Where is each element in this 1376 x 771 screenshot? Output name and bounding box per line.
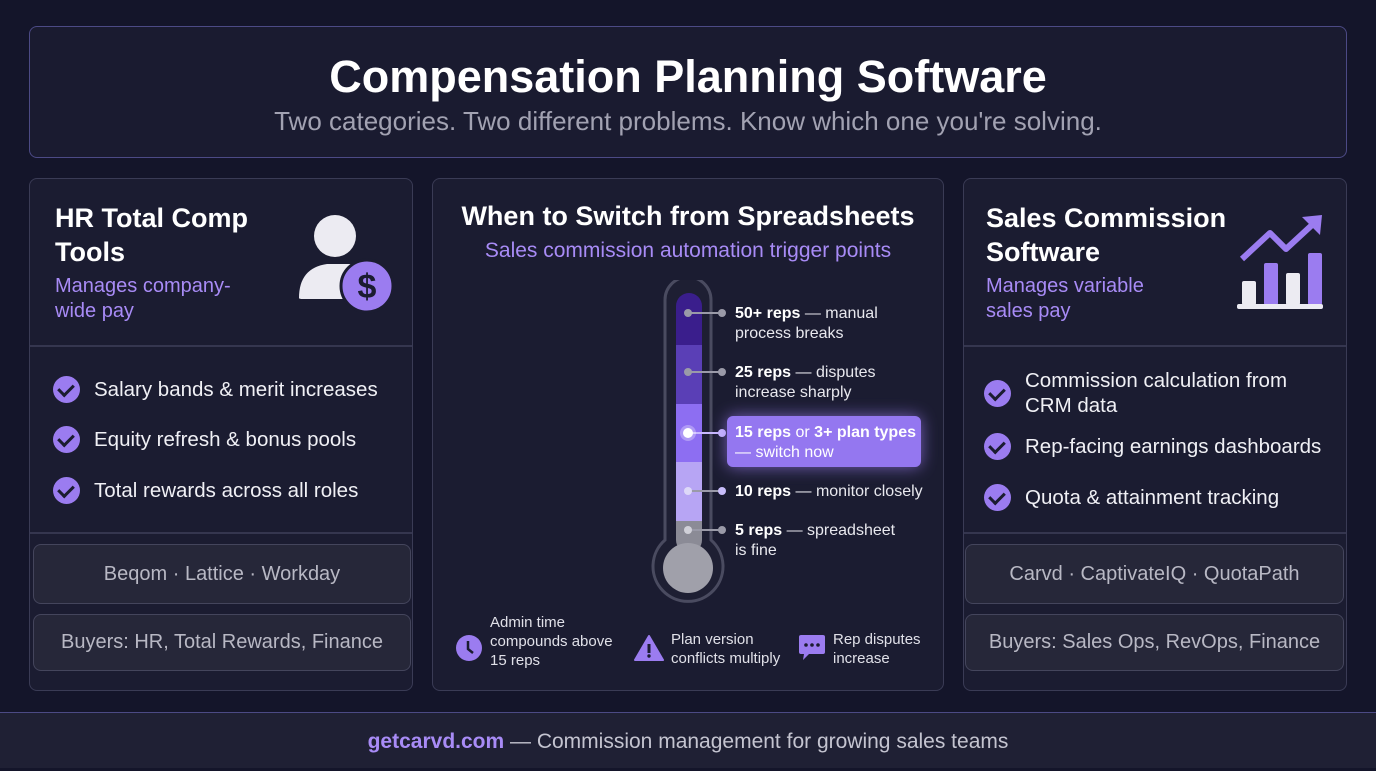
- label: 15 reps callout: [735, 424, 916, 461]
- feature list: [53, 376, 378, 504]
- buyers box: [965, 614, 1344, 671]
- panel: when to switch: [432, 178, 944, 691]
- icon: clock: [456, 635, 482, 661]
- heading: When to Switch from Spreadsheets: [461, 201, 915, 231]
- heading: Software: [986, 237, 1100, 267]
- footer: [0, 712, 1376, 768]
- label: 50+ reps: 50+ reps — manual: [735, 305, 878, 322]
- subtitle: Two categories. Two different problems. Know which one you're solving.: [274, 106, 1102, 136]
- label: 25 reps: 25 reps — disputes: [735, 364, 876, 381]
- text: plan version: Plan version: [671, 631, 754, 648]
- text: admin time: 15 reps: [490, 652, 540, 669]
- heading: Sales Commission: [986, 203, 1226, 233]
- vendors box: Beqom · Lattice · Workday: [104, 562, 340, 584]
- icon: bar chart with arrow: [1237, 215, 1323, 309]
- vendors box: [33, 544, 411, 604]
- text: rep disputes: [833, 631, 921, 667]
- label: 10 reps: 10 reps — monitor closely: [735, 483, 923, 500]
- label: 25 reps: increase sharply: [735, 384, 852, 401]
- chart: thermometer: [652, 280, 932, 603]
- label: 5 reps: [735, 522, 895, 559]
- subheading: sales pay: [986, 300, 1070, 322]
- vendors box: Carvd · CaptivateIQ · QuotaPath: [1009, 562, 1300, 584]
- label: 15 reps callout: — switch now: [735, 444, 834, 461]
- buyers box: Buyers: Sales Ops, RevOps, Finance: [989, 631, 1320, 653]
- label: 50+ reps: [735, 305, 878, 342]
- feature list: Rep-facing earnings dashboards: [1025, 435, 1321, 458]
- text: admin time: compounds above: [490, 633, 613, 650]
- label: 50+ reps: process breaks: [735, 325, 844, 342]
- text: admin time: Admin time: [490, 614, 565, 631]
- label: 5 reps: 5 reps — spreadsheet: [735, 522, 895, 539]
- subheading: Sales commission automation trigger points: [485, 239, 891, 262]
- subheading: [986, 275, 1144, 322]
- feature list: Commission calculation from: [1025, 369, 1287, 392]
- subheading: Manages company-: [55, 275, 231, 297]
- subheading: wide pay: [55, 300, 134, 322]
- feature list: [984, 369, 1321, 511]
- heading: [55, 203, 248, 267]
- label: 5 reps: is fine: [735, 542, 777, 559]
- icon: warning: [634, 635, 664, 661]
- heading: Tools: [55, 237, 125, 267]
- text: plan version: [671, 631, 780, 667]
- title: Compensation Planning Software: [329, 51, 1047, 102]
- feature list: Quota & attainment tracking: [1025, 486, 1279, 509]
- feature list: Total rewards across all roles: [94, 479, 358, 502]
- feature list: CRM data: [1025, 394, 1117, 417]
- text: admin time: [490, 614, 613, 669]
- subheading: Manages variable: [986, 275, 1144, 297]
- icon: chat: [799, 635, 825, 660]
- feature list: Salary bands & merit increases: [94, 378, 378, 401]
- feature list: Equity refresh & bonus pools: [94, 428, 356, 451]
- panel: HR total comp tools: [29, 178, 413, 691]
- text: rep disputes: increase: [833, 650, 890, 667]
- heading: HR Total Comp: [55, 203, 248, 233]
- text: plan version: conflicts multiply: [671, 650, 780, 667]
- label: 25 reps: [735, 364, 876, 401]
- icon: person with dollar: $: [358, 268, 377, 306]
- text: rep disputes: Rep disputes: [833, 631, 921, 648]
- heading: [986, 203, 1226, 267]
- subheading: [55, 275, 231, 322]
- footer: getcarvd.com — Commission management for growing sales teams: [368, 730, 1008, 753]
- vendors box: [965, 544, 1344, 604]
- header panel: [29, 26, 1347, 158]
- label: 15 reps callout: 15 reps or 3+ plan types: [735, 424, 916, 441]
- buyers box: [33, 614, 411, 671]
- icon: person with dollar: [299, 215, 392, 310]
- buyers box: Buyers: HR, Total Rewards, Finance: [61, 631, 383, 653]
- panel: sales commission software: [963, 178, 1347, 691]
